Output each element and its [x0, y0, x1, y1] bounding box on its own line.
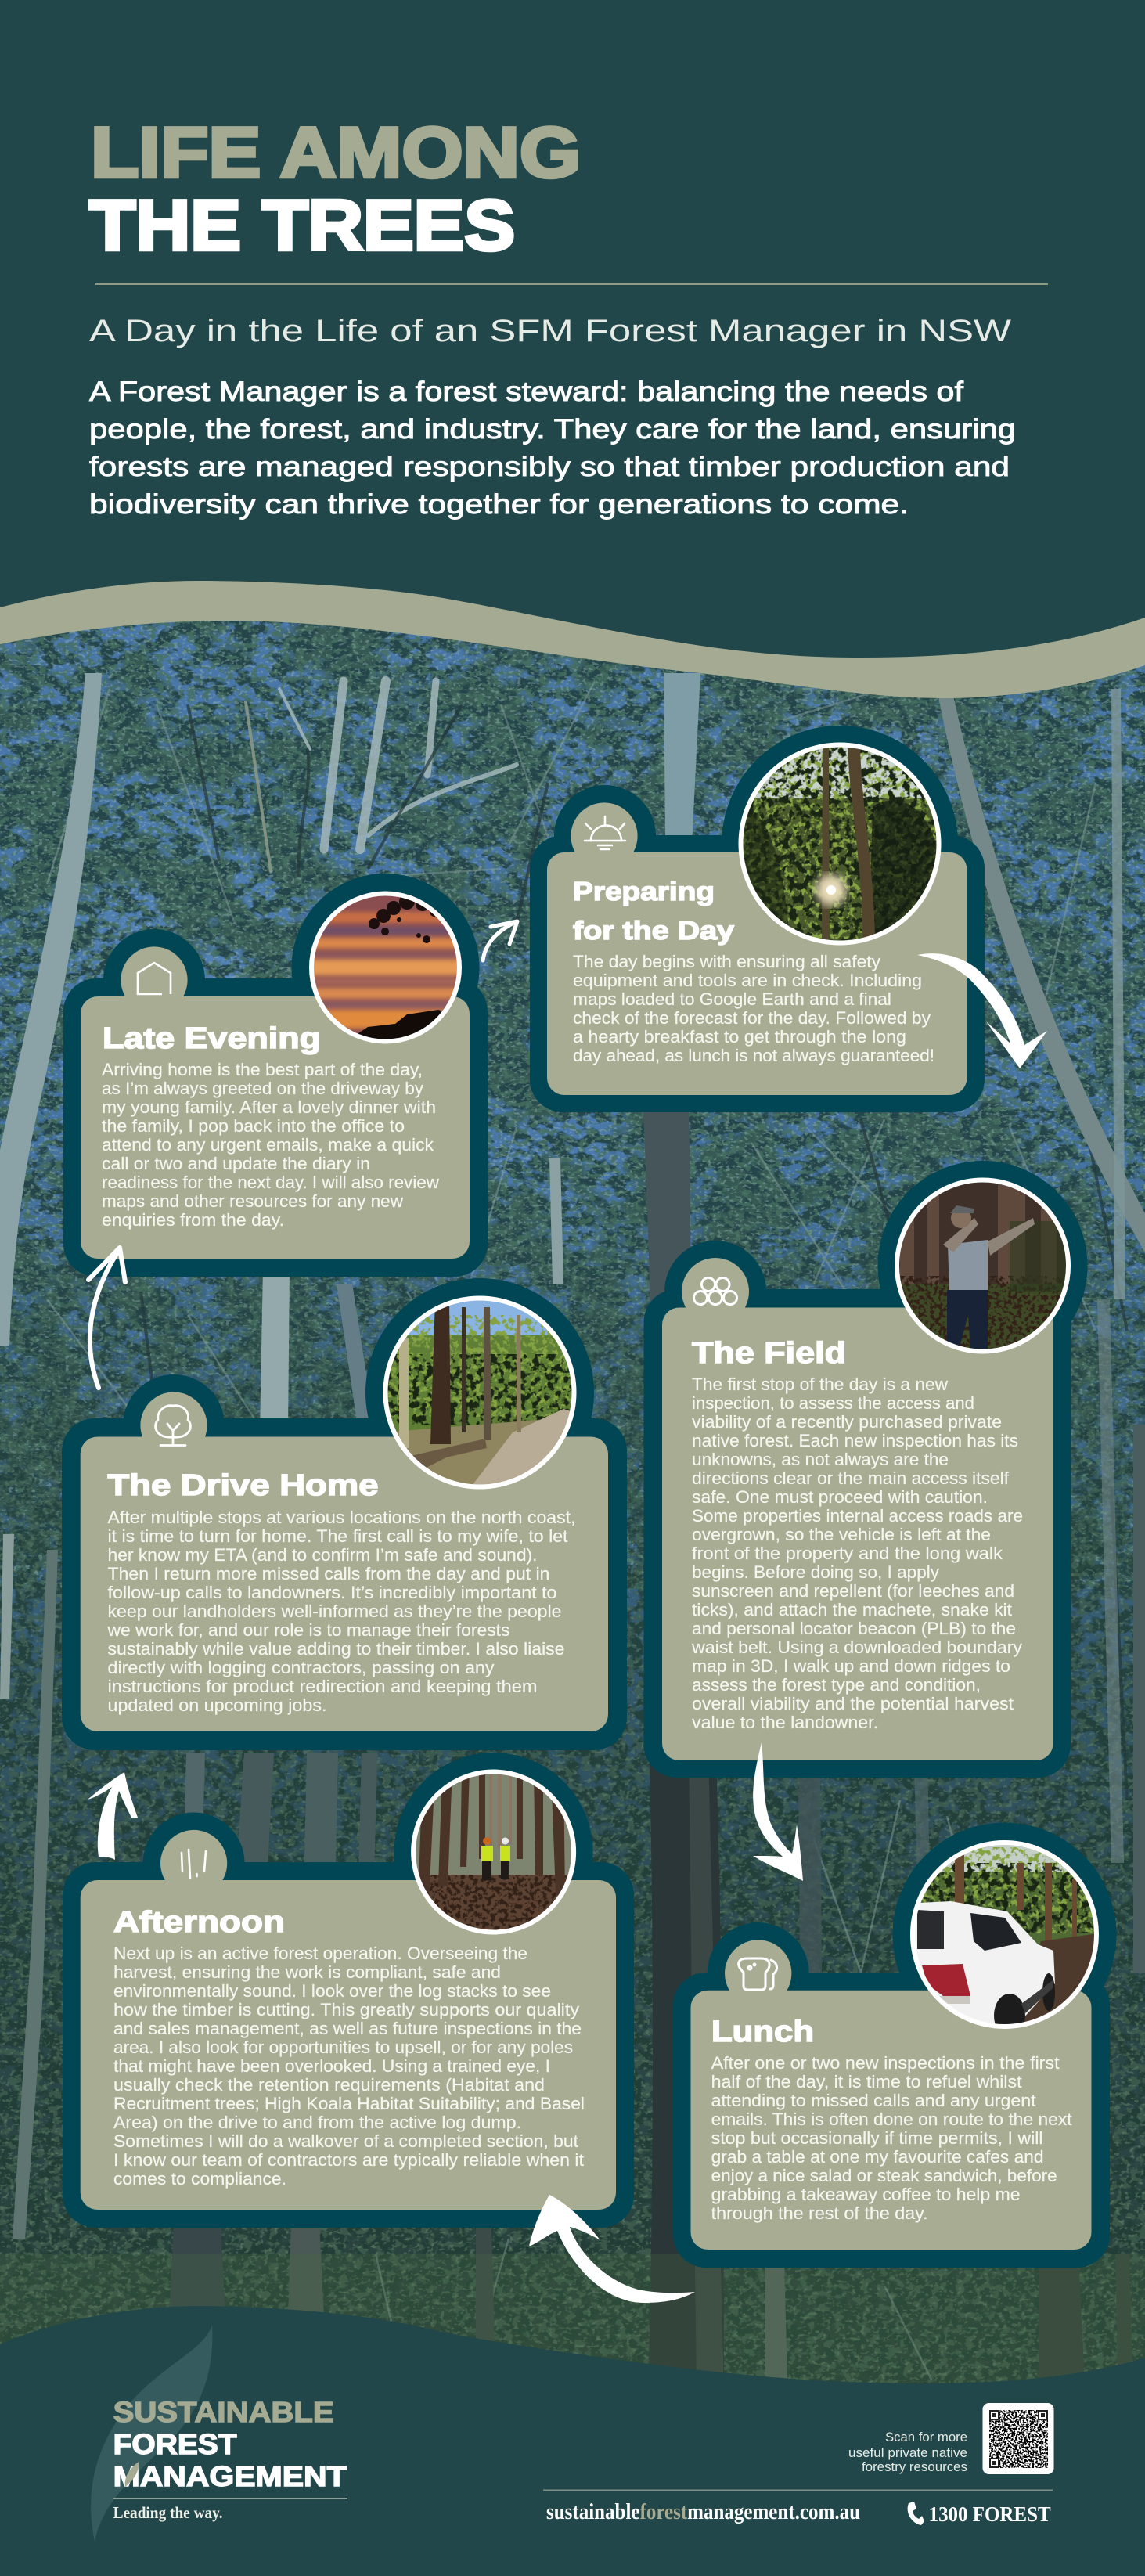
body text: it is time to turn for home. The first call is to my wife, to let: [108, 1526, 568, 1546]
body text: Some properties internal access roads are: [692, 1506, 1023, 1526]
body text: environmentally sound. I look over the log stacks to see: [113, 1981, 551, 2001]
body text: value to the landowner.: [692, 1713, 878, 1732]
intro paragraph: [89, 376, 1016, 520]
body text: call or two and update the diary in: [102, 1154, 370, 1173]
body text: sustainably while value adding to their timber. I also liaise: [108, 1639, 565, 1659]
body text: Area) on the drive to and from the active log dump.: [113, 2113, 521, 2132]
body text: assess the forest type and condition,: [692, 1675, 981, 1695]
body text: [113, 1944, 585, 2189]
icon: log stack: [693, 1277, 737, 1304]
body text: equipment and tools are in check. Including: [573, 971, 922, 990]
title: THE TREES: [89, 186, 515, 265]
phone number: 1300 FOREST: [929, 2502, 1051, 2526]
panel: the field: [643, 1161, 1088, 1778]
body text: inspection, to assess the access and: [692, 1393, 974, 1413]
photo: sunset: [314, 895, 457, 1039]
heading: Late Evening: [103, 1022, 321, 1055]
thin branches: [47, 681, 1096, 2380]
panel: lunch: [673, 1822, 1116, 2268]
body text: instructions for product redirection and keeping them: [108, 1677, 537, 1696]
icon: house: [138, 963, 171, 994]
body text: day ahead, as lunch is not always guaranteed!: [573, 1046, 934, 1065]
icon: bread: [739, 1958, 777, 1990]
body text: that might have been overlooked. Using a trained eye, I: [113, 2056, 550, 2076]
icon: phone: [908, 2502, 924, 2525]
body text: how the timber is cutting. This greatly supports our quality: [113, 2000, 580, 2019]
photo: forest road: [383, 1296, 576, 1489]
body text: [573, 952, 934, 1065]
body text: Arriving home is the best part of the day,: [102, 1060, 423, 1079]
body text: ticks), and attach the machete, snake kit: [692, 1600, 1013, 1619]
logo: sustainable forest management: FOREST: [113, 2428, 237, 2460]
heading: for the Day: [573, 916, 735, 945]
body text: safe. One must proceed with caution.: [692, 1487, 988, 1507]
wavy sage band: [0, 548, 1145, 698]
heading: Preparing: [573, 877, 715, 906]
body text: native forest. Each new inspection has its: [692, 1431, 1018, 1450]
body text: stop but occasionally if time permits, I will: [711, 2128, 1043, 2148]
arrow: drive home to late evening: [88, 1248, 125, 1388]
body text: Next up is an active forest operation. Overseeing the: [113, 1944, 527, 1963]
photo: canopy with sun: [744, 747, 936, 941]
body text: sunscreen and repellent (for leeches and: [692, 1581, 1014, 1601]
body text: unknowns, as not always are the: [692, 1450, 949, 1469]
body text: Then I return more missed calls from the day and put in: [108, 1564, 549, 1583]
body text: usually check the retention requirements (Habitat and: [113, 2075, 545, 2095]
title: [89, 113, 581, 265]
arrow: afternoon to drive home: [88, 1772, 138, 1860]
body text: my young family. After a lovely dinner with: [102, 1097, 436, 1117]
heading: The Field: [692, 1337, 846, 1370]
logo: sustainable forest management: MANAGEMENT: [113, 2460, 347, 2492]
panel: preparing for the day: [530, 726, 985, 1112]
forest background photo: [0, 595, 1145, 2411]
body text: enquiries from the day.: [102, 1210, 284, 1230]
arrow: late evening to preparing: [483, 921, 517, 960]
intro paragraph: A Forest Manager is a forest steward: balancing the needs of: [89, 376, 963, 407]
icon: tree: [156, 1406, 190, 1445]
body text: check of the forecast for the day. Followed by: [573, 1008, 931, 1028]
heading: [573, 877, 735, 945]
website url: sustainableforestmanagement.com.au: [546, 2499, 860, 2524]
body text: and sales management, as well as future inspections in the: [113, 2019, 582, 2038]
logo: sustainable forest management: [91, 2325, 347, 2542]
body text: readiness for the next day. I will also review: [102, 1173, 440, 1192]
body text: the family, I pop back into the office to: [102, 1116, 405, 1136]
body text: attending to missed calls and any urgent: [711, 2091, 1036, 2110]
body text: overall viability and the potential harvest: [692, 1694, 1014, 1713]
body text: The day begins with ensuring all safety: [573, 952, 881, 971]
qr caption: useful private native: [848, 2445, 967, 2460]
body text: grab a table at one my favourite cafes and: [711, 2147, 1044, 2167]
logo: sustainable forest management: SUSTAINABLE: [113, 2396, 334, 2428]
body text: [691, 1374, 1023, 1732]
qr caption: Scan for more: [885, 2430, 967, 2444]
body text: comes to compliance.: [113, 2169, 286, 2189]
heading: Afternoon: [113, 1906, 285, 1939]
heading: The Drive Home: [108, 1469, 379, 1502]
body text: updated on upcoming jobs.: [108, 1695, 326, 1715]
body text: [106, 1508, 576, 1715]
body text: maps and other resources for any new: [102, 1191, 404, 1211]
logo: sustainable forest management: Leading the way.: [113, 2503, 223, 2522]
body text: overgrown, so the vehicle is left at the: [692, 1525, 991, 1544]
body text: we work for, and our role is to manage their forests: [106, 1620, 510, 1640]
arrow: lunch to afternoon: [529, 2195, 695, 2303]
arrow: preparing to the field: [917, 953, 1047, 1068]
body text: directly with logging contractors, passing on any: [108, 1658, 495, 1677]
intro paragraph: forests are managed responsibly so that timber production and: [89, 452, 1010, 482]
arrow: the field to lunch: [753, 1742, 803, 1881]
body text: area. I also look for opportunities to upsell, or for any poles: [113, 2037, 573, 2057]
body text: her know my ETA (and to confirm I’m safe and sound).: [108, 1545, 537, 1565]
body text: grabbing a takeaway coffee to help me: [711, 2185, 1021, 2204]
heading: Lunch: [711, 2016, 814, 2048]
panel: afternoon: [63, 1753, 634, 2228]
photo: workers among pines: [416, 1774, 571, 1930]
body text: and personal locator beacon (PLB) to the: [692, 1619, 1016, 1638]
body text: maps loaded to Google Earth and a final: [573, 989, 891, 1009]
body text: Sometimes I will do a walkover of a completed section, but: [113, 2131, 579, 2151]
body text: I know our team of contractors are typically reliable when it: [113, 2150, 585, 2170]
body text: keep our landholders well-informed as they’re the people: [108, 1601, 562, 1621]
body text: begins. Before doing so, I apply: [692, 1562, 940, 1582]
body text: as I’m always greeted on the driveway by: [102, 1079, 424, 1098]
dark header background: [0, 0, 1145, 658]
qr code: [983, 2403, 1053, 2474]
body text: front of the property and the long walk: [692, 1544, 1003, 1563]
body text: The first stop of the day is a new: [692, 1374, 949, 1394]
body text: enjoy a nice salad or steak sandwich, before: [711, 2166, 1057, 2185]
body text: After multiple stops at various locations on the north coast,: [108, 1508, 576, 1527]
footer background: [0, 2306, 1145, 2576]
body text: viability of a recently purchased private: [692, 1412, 1002, 1432]
body text: map in 3D, I walk up and down ridges to: [692, 1656, 1010, 1676]
icon: cutlery: [182, 1850, 206, 1878]
body text: After one or two new inspections in the first: [711, 2053, 1060, 2073]
body text: directions clear or the main access itself: [692, 1468, 1010, 1488]
body text: attend to any urgent emails, make a quick: [102, 1135, 434, 1155]
title: LIFE AMONG: [91, 113, 581, 193]
body text: [102, 1060, 440, 1230]
tree trunks: [0, 673, 1145, 2395]
panel: the drive home: [62, 1278, 627, 1750]
photo: white 4WD in forest: [910, 1840, 1099, 2037]
pale trunks in front of foliage: [246, 681, 517, 871]
body text: follow-up calls to landowners. It’s incredibly important to: [108, 1583, 557, 1602]
body text: a hearty breakfast to get through the long: [573, 1027, 906, 1047]
icon: sunrise bulb: [585, 816, 625, 849]
intro paragraph: people, the forest, and industry. They care for the land, ensuring: [89, 414, 1016, 445]
body text: emails. This is often done on route to the next: [711, 2109, 1072, 2129]
intro paragraph: biodiversity can thrive together for generations to come.: [89, 489, 909, 520]
body text: harvest, ensuring the work is compliant, safe and: [113, 1962, 501, 1982]
logo leaf watermark: [91, 2325, 212, 2542]
body text: half of the day, it is time to refuel whilst: [711, 2072, 1022, 2091]
body text: waist belt. Using a downloaded boundary: [691, 1637, 1023, 1657]
qr caption: [848, 2430, 967, 2474]
body text: [711, 2053, 1072, 2223]
qr caption: forestry resources: [862, 2459, 967, 2474]
panel: late evening: [63, 874, 488, 1277]
photo: manager in forest: [899, 1182, 1066, 1349]
subtitle: A Day in the Life of an SFM Forest Manager in NSW: [89, 314, 1011, 348]
body text: Recruitment trees; High Koala Habitat Suitability; and Basel: [113, 2094, 585, 2113]
body text: through the rest of the day.: [711, 2203, 928, 2223]
